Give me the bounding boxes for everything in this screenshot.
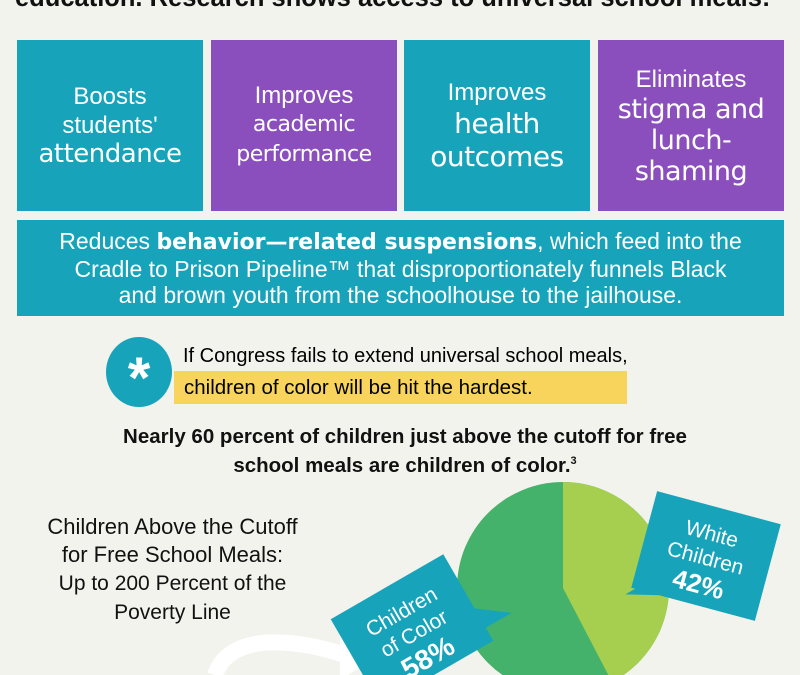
callout: white children: 42%: [669, 563, 728, 605]
panel: suspensions: and brown youth from the schoolhouse to the jailhouse.: [119, 282, 682, 308]
chart label: Up to 200 Percent of the: [59, 572, 286, 595]
statement: [123, 425, 687, 477]
panel: health: Improves: [448, 79, 546, 106]
highlight callout: children of color will be hit the hardest.: [184, 376, 533, 399]
chart label: for Free School Meals:: [62, 542, 283, 567]
callout: children of color: Children: [362, 583, 441, 642]
panel: stigma: shaming: [635, 156, 747, 186]
highlight callout: [174, 345, 628, 404]
panel: attendance: students': [62, 112, 158, 139]
chart label: Children Above the Cutoff: [47, 514, 298, 539]
panel: suspensions: Reduces behavior—related suspensions, which feed into the: [59, 228, 742, 255]
chart label: [47, 514, 298, 624]
callout: white children: White: [683, 516, 741, 552]
callout: children of color: of Color: [377, 606, 452, 662]
panel: health: health: [454, 107, 540, 140]
pie: white children: [563, 482, 669, 675]
chart label: Poverty Line: [114, 601, 231, 624]
icon: asterisk circle: [106, 337, 172, 407]
panel: suspensions: Cradle to Prison Pipeline™ that disproportionately funnels Black: [74, 256, 727, 282]
arrow: [215, 632, 372, 675]
callout: children of color: [331, 539, 519, 675]
panel: attendance: [17, 40, 203, 211]
panel: academic: Improves: [255, 82, 353, 109]
statement: Nearly 60 percent of children just above the cutoff for free: [123, 425, 687, 448]
panel: health: [404, 40, 590, 211]
panel: attendance: attendance: [38, 139, 182, 169]
panel: academic: [211, 40, 397, 211]
panel: stigma: stigma and: [618, 94, 764, 124]
pie: children of color: [457, 482, 669, 675]
panel: academic: academic: [253, 112, 355, 137]
panel: stigma: [598, 40, 784, 211]
panel: academic: performance: [236, 142, 372, 167]
callout: white children: Children: [665, 537, 746, 580]
icon: asterisk circle: *: [128, 346, 150, 411]
panel: stigma: Eliminates: [636, 66, 746, 92]
highlight callout: If Congress fails to extend universal school meals,: [183, 345, 628, 367]
statement: school meals are children of color.3: [233, 454, 577, 477]
panel: suspensions: [17, 220, 784, 316]
panel: stigma: lunch-: [651, 124, 731, 156]
callout: white children: [625, 490, 781, 629]
panel: attendance: Boosts: [73, 83, 147, 110]
panel: health: outcomes: [430, 140, 564, 173]
